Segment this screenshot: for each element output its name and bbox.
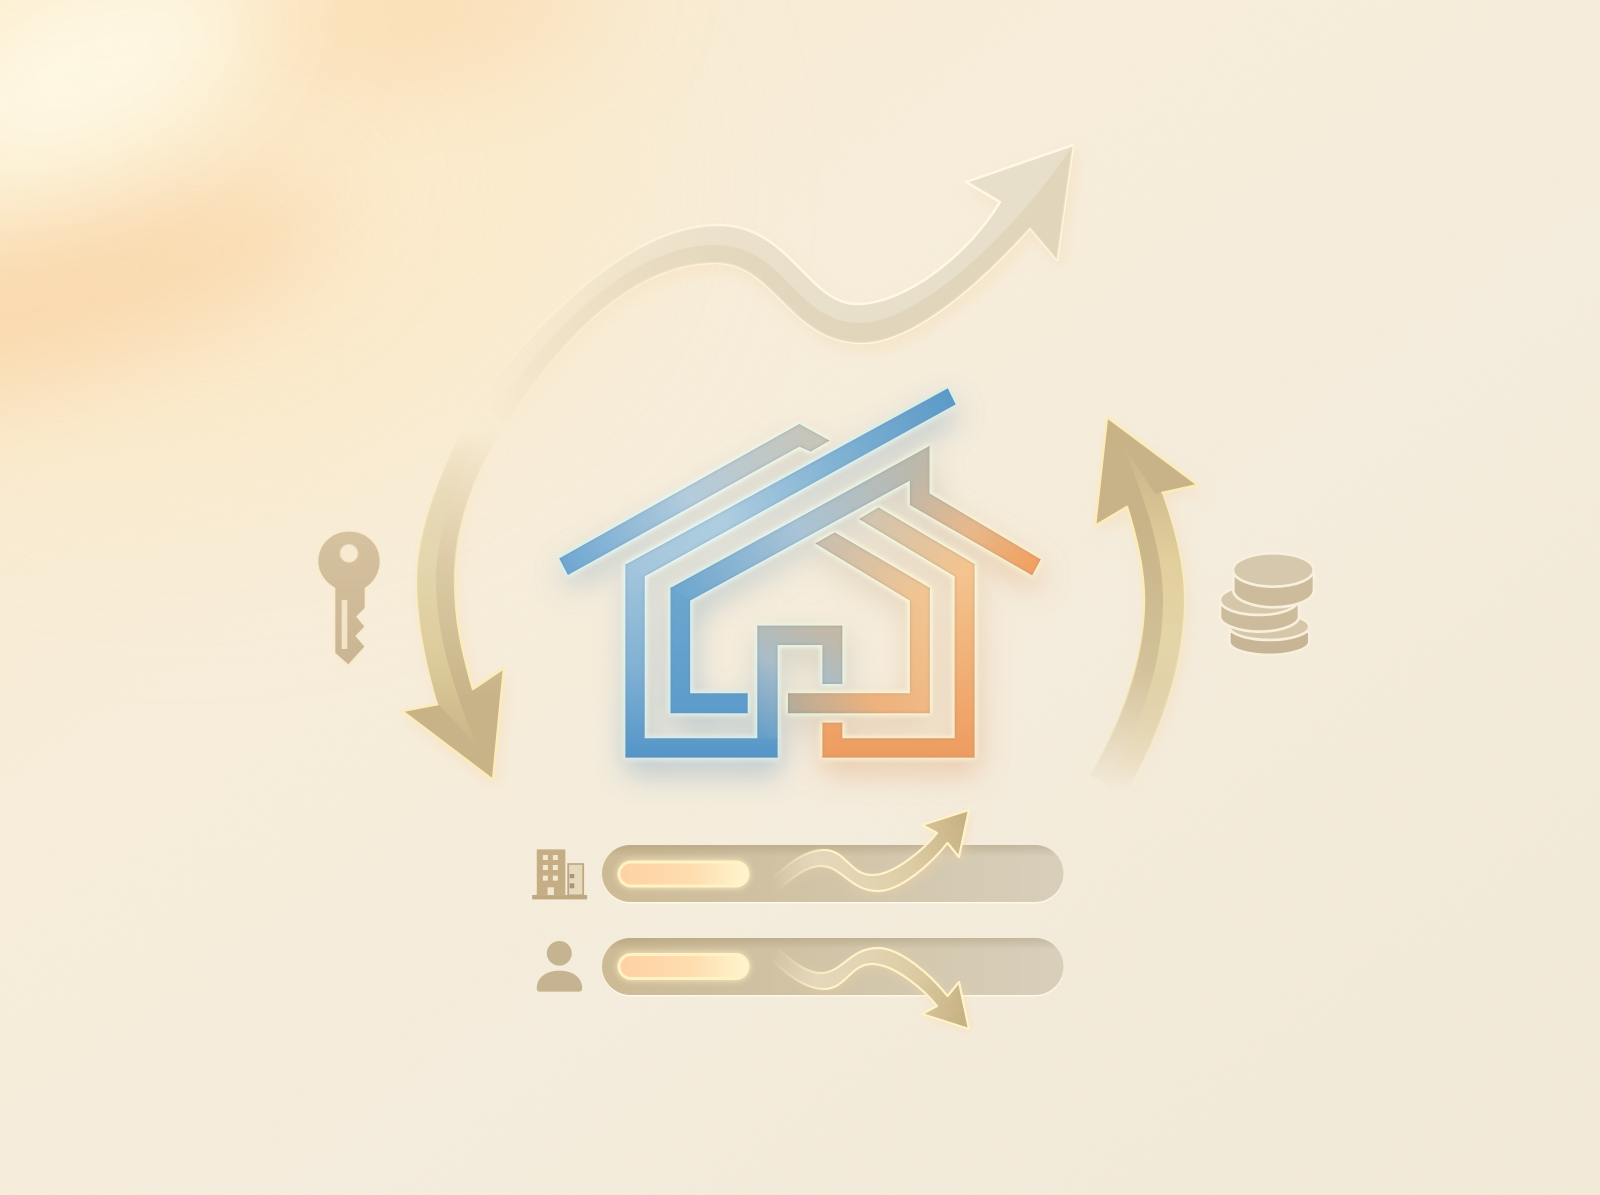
arrow: left descending arrow xyxy=(402,403,507,780)
inner roof and right eave xyxy=(670,446,1041,713)
icon: coin stack xyxy=(1220,553,1314,655)
arrow: top wavy rising arrow xyxy=(476,145,1073,423)
pill: top bar xyxy=(602,845,1064,904)
arrow: mini falling arrow xyxy=(771,947,969,1029)
arrow: right ascending arrow xyxy=(1090,417,1198,795)
outer blue wall xyxy=(625,564,778,758)
arrow: mini rising arrow xyxy=(771,810,969,892)
icon: person xyxy=(537,941,582,992)
upper roof strip xyxy=(559,424,830,575)
glowing bar xyxy=(619,954,748,978)
orange inner wall xyxy=(788,532,931,713)
main roof beam xyxy=(625,388,956,576)
icon: building xyxy=(532,849,587,899)
house logo xyxy=(559,388,1041,758)
pill: bottom bar xyxy=(602,938,1064,996)
door frame xyxy=(757,626,842,740)
orange outer wall xyxy=(822,507,975,758)
icon: key xyxy=(317,531,381,666)
glowing bar xyxy=(619,862,748,886)
